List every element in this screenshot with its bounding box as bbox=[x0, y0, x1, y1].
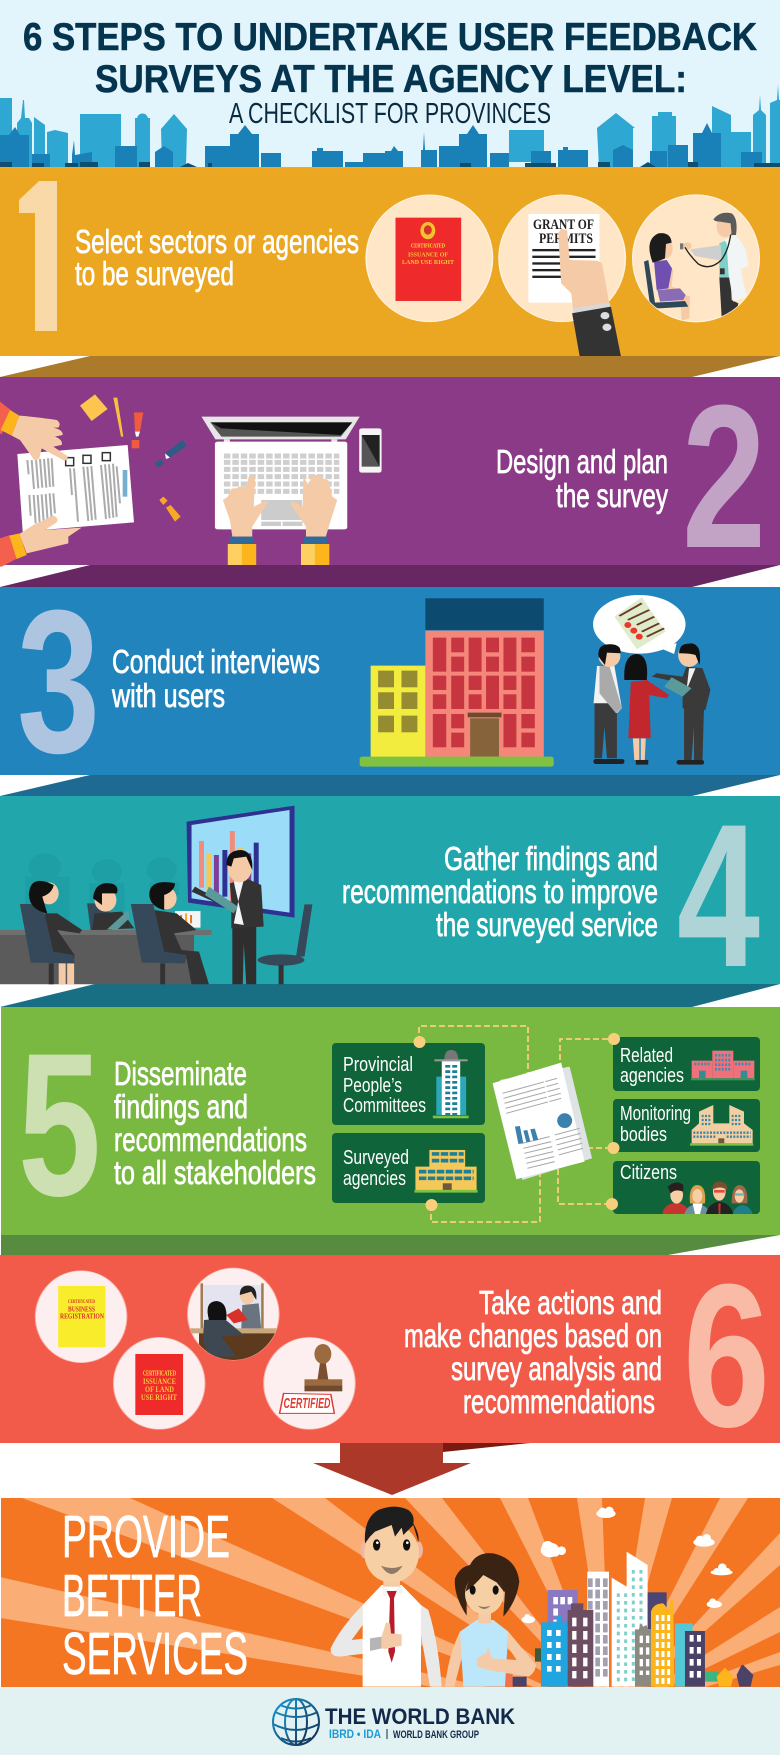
icon: business registration certificate: REGISTRATION bbox=[60, 1312, 104, 1320]
icon: land use certificate bbox=[113, 1337, 205, 1429]
person right with folder bbox=[652, 643, 710, 765]
icon: interview with speech bubble bbox=[593, 595, 710, 765]
icon: buildings bbox=[360, 598, 554, 767]
city and clouds bbox=[504, 1507, 753, 1687]
icon: certified stamp bbox=[264, 1337, 355, 1429]
step 4 text: recommendations to improve bbox=[342, 873, 658, 910]
step 4 text bbox=[342, 840, 658, 943]
step 2 text: the survey bbox=[556, 477, 668, 514]
icon: business registration certificate: CERTIFICATED bbox=[68, 1300, 95, 1305]
box: surveyed agencies: agencies bbox=[343, 1168, 406, 1190]
icon: tan building bbox=[690, 1105, 753, 1146]
woman giving thumbs up bbox=[445, 1553, 536, 1687]
document stack bbox=[493, 1063, 592, 1180]
step 1 text bbox=[75, 223, 359, 292]
footer panel bbox=[0, 1687, 780, 1755]
icon: land use certificate: ISSUANCE OF bbox=[408, 252, 448, 258]
heading: provide better services: BETTER bbox=[62, 1563, 202, 1629]
box: related agencies bbox=[613, 1037, 760, 1091]
panel: step 1 select sectors bbox=[0, 147, 780, 377]
step 6 text: make changes based on bbox=[404, 1317, 662, 1354]
subtitle: A CHECKLIST FOR PROVINCES bbox=[229, 98, 551, 130]
step 5 text: recommendations bbox=[114, 1121, 307, 1158]
panel: step 5 disseminate bbox=[1, 1007, 780, 1255]
presenter bbox=[192, 850, 264, 984]
step 6 text: Take actions and bbox=[479, 1284, 662, 1321]
step 5 text: findings and bbox=[114, 1088, 248, 1125]
box: monitoring bodies bbox=[613, 1099, 760, 1152]
panel: provide better services bbox=[1, 1498, 780, 1687]
seated woman bbox=[20, 881, 82, 984]
panel: step 2 design and plan bbox=[0, 363, 780, 591]
step 3 text bbox=[111, 643, 320, 714]
box: citizens: Citizens bbox=[620, 1162, 677, 1184]
title bbox=[23, 16, 757, 101]
box: monitoring bodies: Monitoring bbox=[620, 1103, 691, 1125]
title: SURVEYS AT THE AGENCY LEVEL: bbox=[95, 58, 687, 101]
step 5 text bbox=[114, 1055, 316, 1191]
step 1 text: to be surveyed bbox=[75, 255, 234, 292]
sunburst rays bbox=[1, 1498, 780, 1687]
box: surveyed agencies bbox=[332, 1133, 485, 1203]
step 4 text: the surveyed service bbox=[436, 906, 658, 943]
meeting room illustration bbox=[0, 806, 312, 984]
logo: globe bbox=[273, 1699, 319, 1745]
connector dots bbox=[414, 1033, 620, 1211]
icon: tower bbox=[433, 1050, 469, 1118]
icon: grant of permits with pointing hand: PERMITS bbox=[539, 231, 593, 247]
empty chair bbox=[258, 904, 312, 984]
panel: step 4 gather findings bbox=[0, 782, 780, 1010]
icon: land use certificate: USE RIGHT bbox=[141, 1393, 178, 1402]
box: provincial people's committees: Committees bbox=[343, 1095, 426, 1117]
step 3 text: with users bbox=[111, 677, 225, 714]
meeting table bbox=[0, 930, 211, 984]
person woman bbox=[624, 654, 669, 765]
step 6 text: survey analysis and bbox=[451, 1350, 662, 1387]
box: provincial people's committees: People’s bbox=[343, 1075, 402, 1097]
icon: office counter scene bbox=[188, 1268, 279, 1362]
icon: land use certificate: LAND USE RIGHT bbox=[402, 259, 455, 266]
icon: grant of permits with pointing hand bbox=[499, 195, 625, 356]
icon: building bbox=[414, 1150, 478, 1193]
icon: land use certificate: OF LAND bbox=[145, 1385, 174, 1394]
presentation screen bbox=[187, 806, 295, 918]
man giving thumbs up bbox=[331, 1507, 442, 1687]
icon: grant of permits with pointing hand: GRANT OF bbox=[533, 217, 594, 233]
icon: stationery bbox=[80, 394, 187, 522]
step 5 text: Disseminate bbox=[114, 1055, 247, 1092]
panel: step 6 take actions bbox=[0, 1255, 780, 1443]
box: provincial people's committees bbox=[332, 1043, 485, 1125]
icon: four citizens bbox=[662, 1182, 753, 1214]
box: related agencies: agencies bbox=[620, 1065, 684, 1087]
icon: business registration certificate: BUSINESS bbox=[68, 1306, 95, 1314]
seated man with laptop bbox=[131, 882, 209, 984]
box: citizens bbox=[613, 1161, 760, 1214]
number 5: 5 bbox=[18, 1011, 101, 1239]
arrow down bbox=[313, 1443, 530, 1495]
icon: pink building bbox=[691, 1051, 755, 1080]
box: provincial people's committees: Provincial bbox=[343, 1054, 413, 1076]
icon: land use certificate bbox=[366, 195, 493, 322]
box: related agencies: Related bbox=[620, 1045, 673, 1067]
icon: smartphone bbox=[359, 428, 382, 473]
skyline illustration bbox=[0, 85, 780, 167]
number 1: 1 bbox=[1, 147, 89, 375]
seated man centre bbox=[87, 883, 134, 930]
heading: provide better services bbox=[62, 1504, 248, 1687]
step 6 text: recommendations bbox=[463, 1383, 655, 1420]
icon: certified stamp: CERTIFIED bbox=[284, 1395, 331, 1412]
step 3 text: Conduct interviews bbox=[112, 643, 320, 680]
icon: land use certificate: CERTIFICATED bbox=[411, 242, 445, 250]
step 1 text: Select sectors or agencies bbox=[75, 223, 359, 260]
heading: provide better services: PROVIDE bbox=[62, 1504, 230, 1570]
logo: the world bank wordmark: WORLD BANK GROUP bbox=[393, 1729, 479, 1741]
icon: survey paper with hands bbox=[0, 402, 134, 567]
step 2 text bbox=[496, 443, 668, 514]
step 6 text bbox=[404, 1284, 662, 1420]
icon: business registration certificate bbox=[35, 1271, 127, 1363]
icon: doctor and patient bbox=[633, 195, 759, 322]
logo: the world bank wordmark bbox=[325, 1704, 515, 1741]
icon: land use certificate: ISSUANCE bbox=[143, 1377, 176, 1386]
panel: step 3 conduct interviews bbox=[0, 568, 780, 796]
number 3: 3 bbox=[17, 568, 100, 796]
step 2 text: Design and plan bbox=[496, 443, 668, 480]
box: surveyed agencies: Surveyed bbox=[343, 1147, 409, 1169]
box: monitoring bodies: bodies bbox=[620, 1124, 667, 1146]
icon: land use certificate: CERTIFICATED bbox=[143, 1370, 176, 1378]
dashed connectors bbox=[419, 1026, 614, 1222]
icon: laptop with typing hands bbox=[201, 417, 360, 565]
person left bbox=[594, 644, 624, 764]
header panel bbox=[0, 0, 780, 167]
step 4 text: Gather findings and bbox=[444, 840, 658, 877]
logo: the world bank wordmark: THE WORLD BANK bbox=[325, 1704, 515, 1729]
heading: provide better services: SERVICES bbox=[62, 1621, 248, 1687]
logo: the world bank wordmark: IBRD • IDA bbox=[329, 1727, 381, 1741]
step 5 text: to all stakeholders bbox=[114, 1154, 316, 1191]
